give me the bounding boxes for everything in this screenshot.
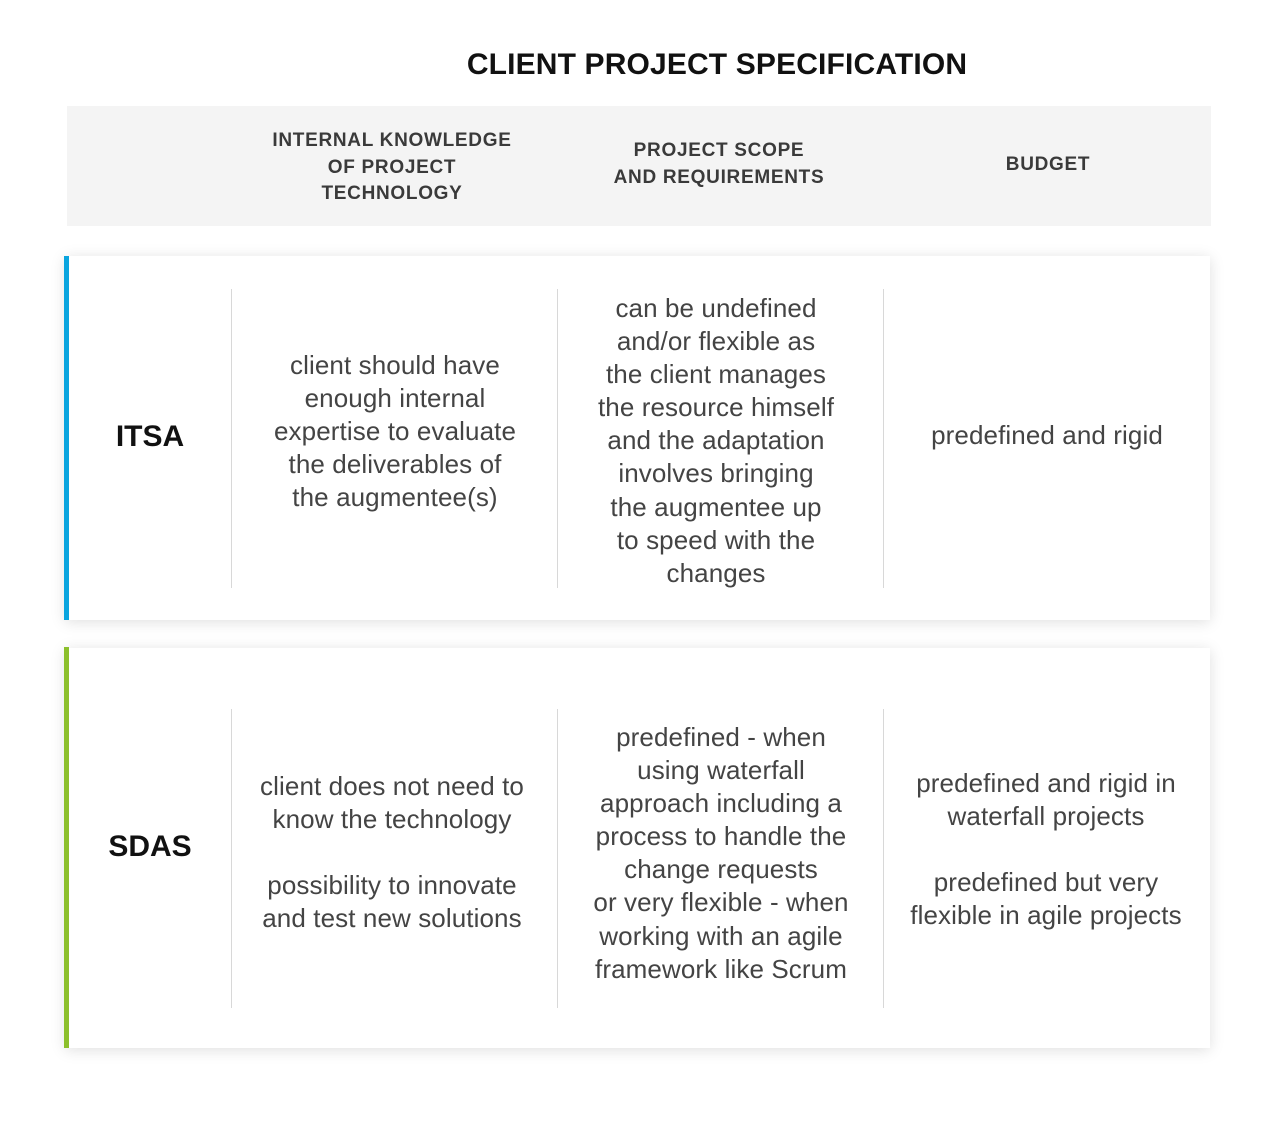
text: ITSA scope: changes — [666, 558, 766, 588]
text: SDAS budget: predefined and rigid in — [916, 768, 1176, 798]
text: ITSA knowledge: the deliverables of — [289, 449, 501, 479]
column heading: internal knowledge: TECHNOLOGY — [321, 183, 463, 204]
text: ITSA scope: can be undefined — [615, 293, 817, 323]
text: SDAS knowledge: and test new solutions — [262, 903, 522, 933]
header band — [67, 106, 1211, 226]
text: SDAS scope: process to handle the — [596, 821, 846, 851]
text: SDAS budget — [910, 768, 1182, 930]
column heading: internal knowledge — [272, 130, 512, 204]
text: SDAS scope: predefined - when — [616, 722, 826, 752]
text: SDAS scope: or very flexible - when — [593, 887, 849, 917]
text: SDAS budget: predefined but very — [934, 867, 1158, 897]
text: ITSA scope: the client manages — [606, 359, 826, 389]
text: SDAS scope: change requests — [624, 854, 818, 884]
text: ITSA scope: involves bringing — [618, 458, 814, 488]
title: CLIENT PROJECT SPECIFICATION — [467, 48, 967, 81]
text: SDAS scope: using waterfall — [637, 755, 805, 785]
text: ITSA knowledge: the augmentee(s) — [292, 482, 498, 512]
text: SDAS scope: framework like Scrum — [595, 954, 847, 984]
text: ITSA budget: predefined and rigid — [931, 420, 1163, 450]
text: SDAS knowledge: know the technology — [273, 804, 511, 834]
label: ITSA: ITSA — [116, 420, 184, 453]
column heading: budget: BUDGET — [1006, 154, 1090, 175]
text: ITSA scope: and/or flexible as — [617, 326, 815, 356]
panel: SDAS — [65, 648, 1210, 1048]
text: ITSA scope: and the adaptation — [607, 425, 825, 455]
text: ITSA scope: the resource himself — [598, 392, 834, 422]
column heading: internal knowledge: INTERNAL KNOWLEDGE — [272, 130, 512, 151]
text: SDAS budget: flexible in agile projects — [910, 900, 1182, 930]
column heading: scope: PROJECT SCOPE — [634, 140, 804, 161]
column heading: scope: AND REQUIREMENTS — [614, 166, 824, 188]
text: ITSA scope — [598, 293, 834, 588]
text: ITSA knowledge: client should have — [290, 350, 500, 380]
text: SDAS knowledge: client does not need to — [260, 771, 524, 801]
text: SDAS scope: approach including a — [600, 788, 842, 818]
text: SDAS knowledge: possibility to innovate — [267, 870, 517, 900]
text: ITSA scope: to speed with the — [617, 525, 815, 555]
text: ITSA knowledge: expertise to evaluate — [274, 416, 516, 446]
text: SDAS scope: working with an agile — [599, 921, 843, 951]
text: SDAS knowledge — [260, 771, 524, 933]
text: ITSA scope: the augmentee up — [610, 492, 822, 522]
column heading: scope — [614, 140, 824, 188]
text: SDAS scope — [593, 722, 849, 984]
text: ITSA knowledge — [274, 350, 516, 512]
text: ITSA knowledge: enough internal — [305, 383, 485, 413]
column heading: internal knowledge: OF PROJECT — [328, 156, 456, 178]
text: SDAS budget: waterfall projects — [948, 801, 1144, 831]
label: SDAS: SDAS — [108, 830, 192, 863]
panel: ITSA — [65, 256, 1210, 620]
